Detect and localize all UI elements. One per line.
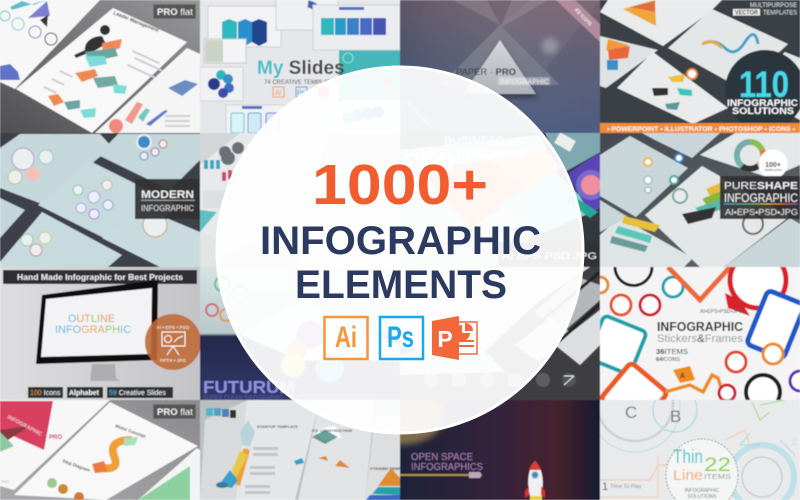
tile: Futurum: FUTURUM [203, 377, 295, 397]
tile: 110 infographic solutions: SOLUTIONS [732, 106, 794, 116]
tile: My Slides: Ai [275, 90, 282, 97]
tile: Thin Line items: 22 [704, 455, 731, 476]
tile: Thin Line items: Line [673, 467, 703, 484]
tile: Outline infographic monitor: Alphabet [69, 390, 100, 397]
tile: Pureshape infographic: AI•EPS•PSD•JPG [725, 207, 798, 217]
icon: PowerPoint: P [437, 326, 453, 352]
tile: Thin Line items: Thin [673, 447, 703, 468]
tile: rocket and pyramid sheets: ICE CONSTRUCTION [312, 428, 352, 433]
tile: PRO flat motor concept: Step Diagram [62, 458, 91, 473]
icon: Adobe Photoshop: Ps [387, 321, 414, 354]
tile: Outline infographic monitor: 100 Icons [30, 390, 61, 397]
icon: PowerPoint [432, 316, 477, 360]
tile: PRO flat motor concept [0, 399, 201, 500]
icon: Adobe Illustrator [324, 317, 368, 359]
tile: Pureshape infographic: 100+ [765, 162, 781, 169]
tile: My Slides: Ps [297, 90, 306, 97]
tile: Paper Pro infographic: 28 Templates [404, 100, 433, 130]
tile: rocket and pyramid sheets [200, 399, 411, 500]
tile: 258 business concepts [400, 132, 601, 268]
tile: 110 infographic solutions: VECTOR [735, 10, 759, 16]
tile: Thin Line items: INFOGRAPHIC [685, 488, 720, 494]
tile: Modern infographic [0, 132, 201, 268]
tile: 110 infographic solutions: INFOGRAPHIC [727, 98, 799, 108]
tile: PRO flat motor concept: PRO [1, 479, 10, 484]
tile: Pureshape infographic: TEMPLATES [764, 168, 782, 172]
tile: 110 infographic solutions: MULTIPURPOSE [750, 3, 797, 9]
tile: PRO flat leader management: PRO flat [157, 7, 193, 18]
tile: PRO flat motor concept: Motor Concept [115, 423, 147, 439]
tile: Open Space infographics [399, 399, 601, 500]
tile: rocket and pyramid sheets: STARTUP TEMPLATE [257, 424, 298, 429]
tile: Futurum [199, 266, 400, 402]
tile: Thin Line items: C [625, 403, 637, 422]
tile: Futurum: SUPER CLEAN INFOGRAPHIC [203, 395, 283, 402]
tile: 110 infographic solutions: TEMPLATES [763, 10, 797, 16]
headline: 1000+: 1000+ [312, 153, 488, 217]
tile: My Slides: My Slides [257, 58, 345, 79]
tile: Thin Line items: 1 [602, 481, 608, 493]
tile: Paper Pro infographic: PAPER · PRO [456, 67, 516, 77]
tile: Outline infographic monitor: INFOGRAPHIC [55, 324, 131, 336]
tile: Stickers and Frames: A [680, 373, 685, 380]
tile: 258 business concepts: AI EPS PSD JPG [502, 251, 597, 261]
tile: PRO flat leader management [0, 0, 200, 134]
tile: PRO flat motor concept: PRO [49, 435, 62, 441]
tile: PRO flat motor concept: PRO flat [157, 407, 193, 418]
tile: Thin Line items: 2 [792, 437, 797, 447]
tile: 110 infographic solutions: 110 [739, 64, 789, 105]
tile: Paper Pro infographic: 49 Icons [573, 7, 593, 27]
tile: Paper Pro infographic [399, 0, 601, 134]
tile: 110 infographic solutions [599, 0, 800, 134]
icon: rocket [525, 461, 545, 500]
tile: 258 business concepts: CONCEPTS [457, 149, 525, 161]
tile: PRO flat motor concept: INFOGRAPHIC [6, 414, 43, 438]
central circle panel [217, 67, 583, 433]
tile: 258 business concepts: BUSINESS [444, 135, 504, 147]
tile: Modern infographic: MODERN [141, 189, 194, 201]
icon: Adobe Photoshop [380, 317, 423, 359]
tile: Pureshape infographic: PURE SHAPE [724, 180, 798, 192]
tile: business icons sheets (mostly behind circle) [199, 132, 257, 268]
tile: Stickers and Frames: 36ITEMS [656, 347, 688, 356]
tile: Outline infographic monitor: PPTX • JPG [160, 358, 186, 364]
tile: rocket and pyramid sheets: PYRAMID TEMPLATE [370, 466, 411, 471]
tile: My Slides: 74 CREATIVE TEMPLATES [264, 80, 339, 86]
tile: Outline infographic monitor: OUTLINE [68, 313, 115, 325]
tile: 110 infographic solutions: • POWERPOINT • ILLUSTRATOR • PHOTOSHOP • ICONS • [607, 126, 796, 133]
tile: Stickers and Frames: 64ICONS [656, 357, 681, 363]
tile: Modern infographic: INFOGRAPHIC [141, 203, 194, 213]
tile: Pureshape infographic [599, 132, 800, 268]
tile: Thin Line items: ITEMS [704, 472, 731, 481]
tile: Thin Line items: SOLUTIONS [688, 494, 717, 500]
tile: PRO flat leader management: Leader Management [112, 10, 160, 34]
tile: Thin Line items: B [670, 407, 681, 426]
tile: Stickers and Frames: INFOGRAPHIC [657, 320, 743, 334]
tile: Outline infographic monitor: AI • EPS • PSD [157, 325, 190, 331]
tile: My Slides [200, 0, 401, 134]
tile: Thin Line items: 3 [790, 487, 795, 497]
tile: Outline infographic monitor: 59 Creative Slides [109, 390, 166, 397]
tile: Thin Line items [599, 399, 800, 500]
tile: Outline infographic monitor [0, 266, 201, 400]
tile: Open Space infographics: INFOGRAPHICS [411, 462, 483, 473]
tile: Stickers and Frames [599, 266, 800, 401]
tile: 258 business concepts: 258 [404, 147, 454, 177]
icon: Adobe Illustrator: Ai [335, 321, 357, 354]
tile: Paper Pro infographic: INFOGRAPHIC [500, 79, 549, 86]
tile: Open Space infographics: OPEN SPACE [411, 452, 473, 463]
tile: Stickers and Frames: Stickers&Frames [657, 333, 744, 345]
headline: INFOGRAPHIC: INFOGRAPHIC [260, 219, 541, 263]
tile: Stickers and Frames: AI•EPS•PSD•JPG [700, 309, 743, 315]
tile: Thin Line items: Time To Play [610, 484, 642, 490]
headline: ELEMENTS: ELEMENTS [295, 263, 507, 307]
tile: sheets on desk [400, 266, 601, 401]
tile: Outline infographic monitor: Hand Made Infographic for Best Projects [17, 273, 184, 282]
